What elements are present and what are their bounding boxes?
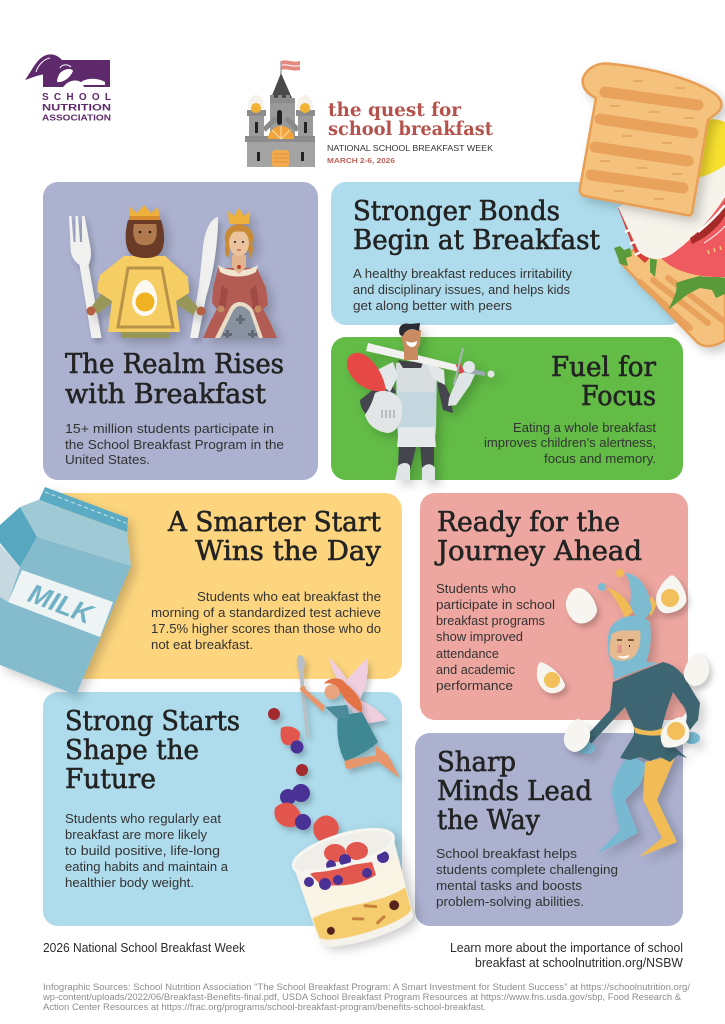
panel: Stronger Bonds	[331, 182, 683, 325]
text: bonds body: and disciplinary issues, and helps kids	[353, 282, 570, 297]
berries in glass	[324, 844, 346, 862]
text: smarter body: morning of a standardized test achieve	[151, 605, 381, 620]
heading: future: Shape the	[65, 735, 199, 766]
illustration: fairy with spoon	[297, 655, 400, 778]
title: the quest for school breakfast	[327, 99, 493, 165]
footer: sources: Action Center Resources at https://frac.org/programs/school-breakfast-program/benefits-school-breakfast.	[43, 1002, 486, 1012]
yolk	[697, 119, 725, 178]
text: minds body: School breakfast helps	[436, 846, 578, 861]
panel: Ready for the Journey Ahead	[420, 493, 688, 720]
text: smarter body: 17.5% higher scores than those who do	[151, 621, 381, 636]
heading: focus	[551, 352, 656, 412]
neck and head	[404, 347, 418, 360]
hands	[577, 742, 595, 754]
text: minds body	[436, 846, 618, 909]
arms	[360, 378, 453, 414]
egg 6	[661, 717, 689, 748]
heading: journey: Ready for the	[437, 507, 620, 538]
collar	[398, 360, 424, 368]
heading: realm: The Realm Rises	[65, 349, 284, 380]
arugula	[614, 246, 725, 310]
text: future body: breakfast are more likely	[65, 827, 207, 842]
logo: School Nutrition Association: SCHOOL	[42, 92, 111, 103]
egg 1	[566, 588, 597, 623]
illustration: knight	[347, 323, 494, 480]
egg white	[618, 164, 725, 259]
heading: bonds: Begin at Breakfast	[353, 225, 600, 256]
text: journey body: performance	[436, 678, 513, 693]
heading: bonds	[353, 196, 600, 256]
text: bonds body: get along better with peers	[353, 298, 513, 313]
head	[324, 684, 340, 700]
legs	[398, 443, 434, 470]
illustration: falling berries	[268, 708, 339, 842]
text: future body: healthier body weight.	[65, 875, 194, 890]
text: focus body: improves children’s alertness,	[484, 435, 656, 450]
illustration: parfait glass	[289, 820, 420, 954]
footer: sources: wp-content/uploads/2022/06/Breakfast-Benefits-final.pdf, USDA School Breakfast Program Resources at https://www.fns.usda.gov/sbp, Food Research &	[42, 992, 681, 1002]
text: journey body: Students who	[436, 581, 516, 596]
heading: focus: Focus	[581, 381, 656, 412]
text: minds body: problem-solving abilities.	[436, 894, 584, 909]
torso	[589, 662, 700, 762]
heading: smarter: Wins the Day	[195, 536, 382, 567]
text: journey body	[436, 581, 555, 693]
king	[86, 205, 206, 338]
heading: minds: the Way	[437, 805, 541, 836]
heading: future	[65, 706, 240, 795]
heading: minds: Sharp	[437, 747, 516, 778]
heading: bonds: Stronger Bonds	[353, 196, 560, 227]
footer: week label: 2026 National School Breakfast Week	[43, 941, 246, 955]
bacon	[618, 205, 652, 263]
egg 3	[537, 662, 565, 693]
top seal	[39, 487, 128, 532]
panel: The Realm Rises with Breakfast	[43, 182, 318, 480]
leg yellow	[639, 755, 677, 857]
heading: journey	[434, 507, 642, 567]
text: future body: Students who regularly eat	[65, 811, 221, 826]
egg 5	[564, 719, 590, 752]
text: focus body: Eating a whole breakfast	[513, 420, 656, 435]
illustration: king and queen with fork and knife	[69, 205, 277, 338]
wings	[330, 658, 387, 724]
milk label: MILK	[24, 578, 99, 631]
text: journey body: breakfast programs	[436, 613, 545, 628]
footer: learn more: breakfast at schoolnutrition.org/NSBW	[475, 956, 683, 970]
queen	[203, 208, 277, 338]
text: journey body: participate in school	[436, 597, 555, 612]
text: journey body: and academic	[436, 662, 515, 677]
onion	[690, 202, 725, 244]
footer: sources: Infographic Sources: School Nutrition Association “The School Breakfast Program: A Smart Investment for Student Success” at https://schoolnutrition.org/	[43, 982, 691, 992]
text: realm body: United States.	[65, 452, 150, 467]
text: journey body: attendance	[436, 646, 499, 661]
band	[8, 570, 113, 637]
bottom toast	[620, 235, 725, 346]
belt	[634, 727, 664, 736]
logo: School Nutrition Association: NUTRITION	[42, 102, 111, 114]
hood	[608, 616, 658, 680]
text: bonds body	[353, 266, 573, 313]
panel: Fuel for Focus	[331, 337, 683, 480]
sword	[366, 343, 460, 372]
heading: smarter: A Smarter Start	[167, 507, 381, 538]
tomato	[655, 195, 725, 277]
icon: castle logo	[245, 60, 315, 167]
heading: journey: Journey Ahead	[434, 536, 642, 567]
heading: realm: with Breakfast	[65, 379, 266, 410]
egg 2	[656, 575, 686, 613]
heading: focus: Fuel for	[551, 352, 656, 383]
text: future body: to build positive, life-long	[65, 843, 220, 858]
text: focus body: focus and memory.	[544, 451, 656, 466]
footer: learn more: Learn more about the importance of school	[450, 941, 683, 955]
top toast	[580, 64, 721, 215]
panel: Strong Starts Shape the Future	[43, 692, 402, 926]
logo: School Nutrition Association: ASSOCIATION	[42, 112, 111, 122]
illustration: milk carton	[0, 487, 131, 695]
hair	[324, 678, 362, 713]
plume	[347, 353, 386, 392]
illustration: jester juggling eggs	[537, 569, 709, 857]
heading: realm	[65, 349, 284, 410]
heading: future: Strong Starts	[65, 706, 240, 737]
heading: minds	[437, 747, 592, 836]
face	[610, 630, 641, 661]
heading: minds: Minds Lead	[437, 776, 592, 807]
spoon	[297, 655, 309, 737]
icon: knife	[190, 217, 218, 338]
legs	[345, 745, 400, 778]
torso	[396, 363, 437, 446]
hat	[607, 588, 633, 618]
left side	[0, 545, 20, 602]
title: the quest for school breakfast: the quest for	[328, 99, 462, 121]
text: smarter body: not eat breakfast.	[151, 637, 253, 652]
footer: sources	[42, 982, 691, 1012]
body front	[0, 537, 131, 695]
footer: learn more	[450, 941, 683, 970]
text: future body: eating habits and maintain a	[65, 859, 229, 874]
helmet	[365, 391, 402, 433]
logo: School Nutrition Association	[25, 54, 111, 122]
heading: smarter	[167, 507, 382, 567]
egg 4	[684, 653, 709, 686]
panel: Sharp Minds Lead the Way	[415, 733, 683, 926]
jester body	[577, 569, 700, 857]
text: realm body: 15+ million students participate in	[65, 421, 274, 436]
leg blue	[597, 754, 647, 854]
title: the quest for school breakfast: NATIONAL SCHOOL BREAKFAST WEEK	[327, 143, 493, 153]
text: realm body: the School Breakfast Program in the	[65, 437, 284, 452]
roof	[20, 500, 131, 566]
illustration: breakfast sandwich	[580, 64, 725, 346]
title: the quest for school breakfast: school breakfast	[328, 118, 493, 140]
icon: fork	[69, 216, 102, 338]
heading: future: Future	[65, 764, 156, 795]
title: the quest for school breakfast: MARCH 2-6, 2026	[327, 156, 395, 165]
text: bonds body: A healthy breakfast reduces irritability	[353, 266, 573, 281]
panel: A Smarter Start	[60, 493, 402, 679]
text: smarter body: Students who eat breakfast the	[197, 589, 381, 604]
text: focus body	[484, 420, 656, 466]
torso	[325, 705, 350, 718]
text: future body	[65, 811, 229, 890]
skirt	[337, 712, 378, 761]
text: realm body	[65, 421, 284, 467]
text: minds body: students complete challenging	[436, 862, 618, 877]
text: minds body: mental tasks and boosts	[436, 878, 583, 893]
text: journey body: show improved	[436, 629, 523, 644]
text: smarter body	[151, 589, 381, 652]
glass and layers	[289, 820, 420, 954]
